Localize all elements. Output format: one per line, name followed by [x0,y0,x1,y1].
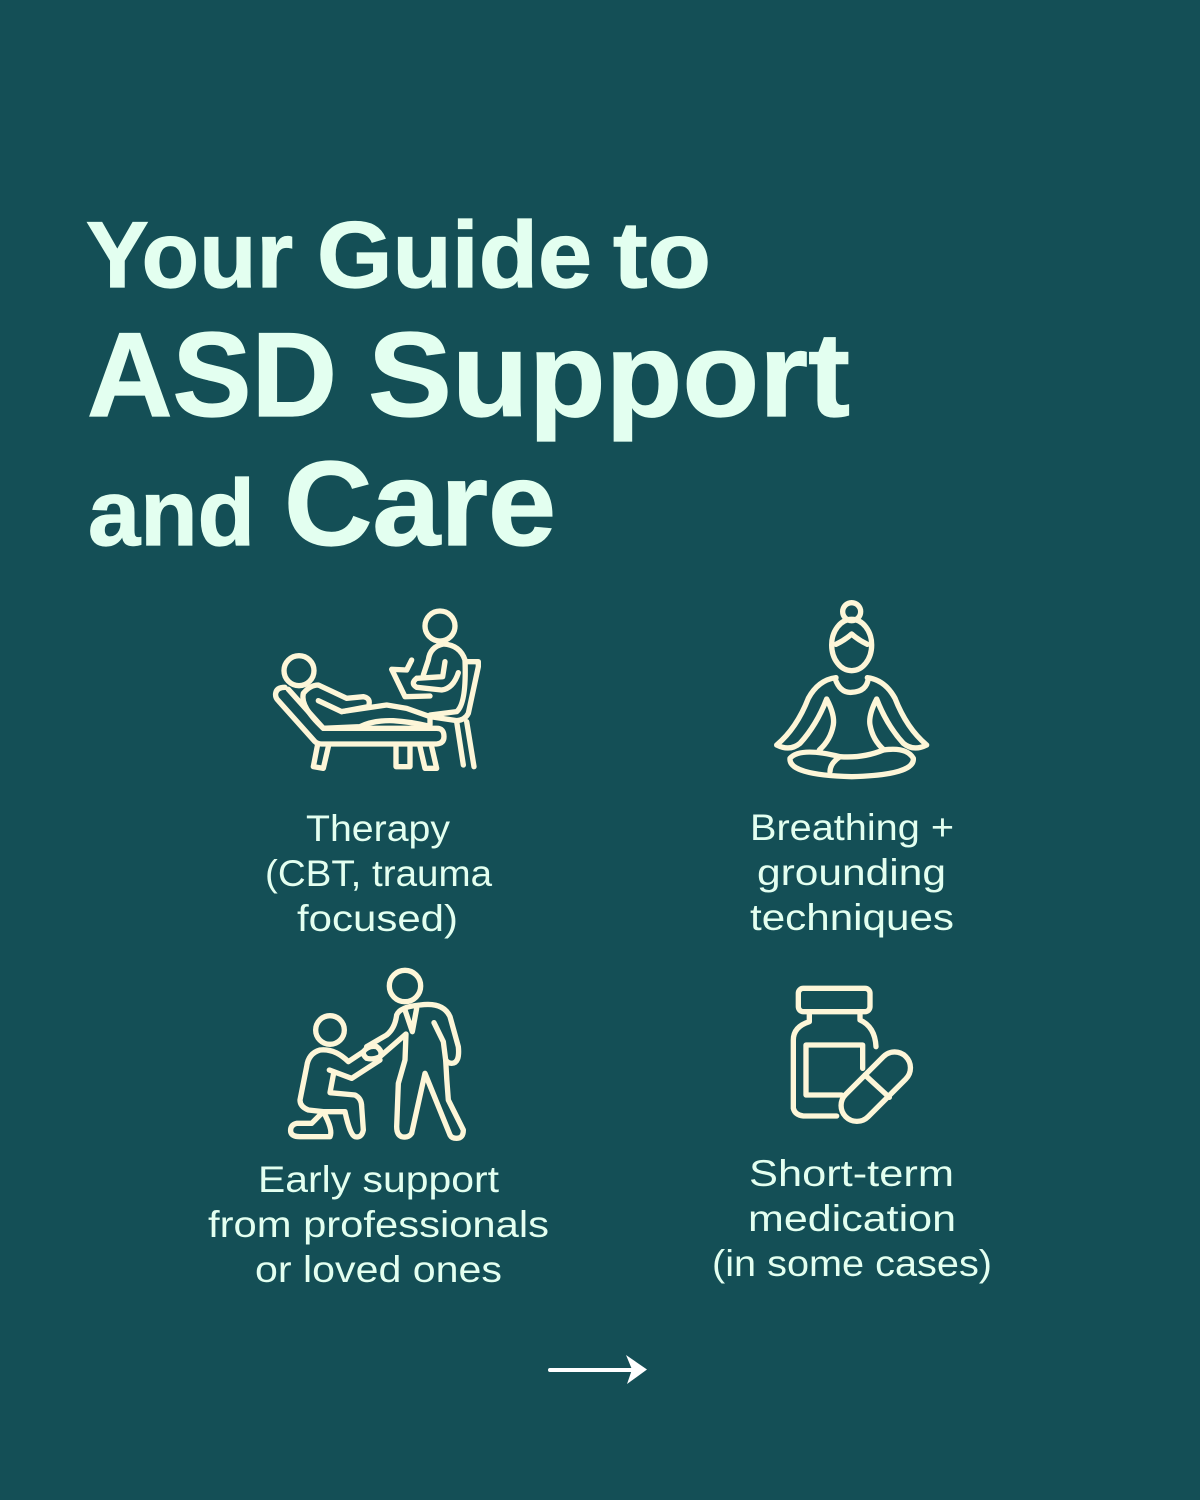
icon: pill bottle and capsule [793,988,917,1128]
icon: meditating person [777,603,927,777]
panel: breathing [750,603,954,938]
title: ASD [87,308,337,442]
label: early support: or loved ones [255,1249,502,1290]
label: early support: from professionals [208,1204,549,1245]
label: therapy: focused) [297,898,458,939]
label: early support: Early support [258,1159,500,1200]
title: Your [86,202,293,307]
label: medication [712,1153,992,1284]
label: therapy: Therapy [306,808,451,849]
label: breathing: Breathing + [750,807,954,848]
icon: therapist and patient on couch [276,611,478,768]
label: medication: (in some cases) [712,1243,992,1284]
title [86,202,850,571]
label: early support [208,1159,549,1290]
title: and [88,460,255,565]
title: Guide [317,202,592,307]
label: breathing: techniques [750,897,954,938]
label: breathing [750,807,954,938]
title: to [613,202,711,307]
label: medication: Short-term [749,1153,954,1194]
title: Support [368,308,850,442]
label: medication: medication [748,1198,956,1239]
label: therapy: (CBT, trauma [265,853,492,894]
label: breathing: grounding [757,852,946,893]
arrow [550,1355,647,1384]
title: Care [284,437,556,571]
label: therapy [265,808,492,939]
panel: early support [208,970,549,1290]
panel: medication [712,988,992,1284]
icon: standing person helping kneeling person [291,970,463,1138]
panel: therapy [265,611,492,939]
